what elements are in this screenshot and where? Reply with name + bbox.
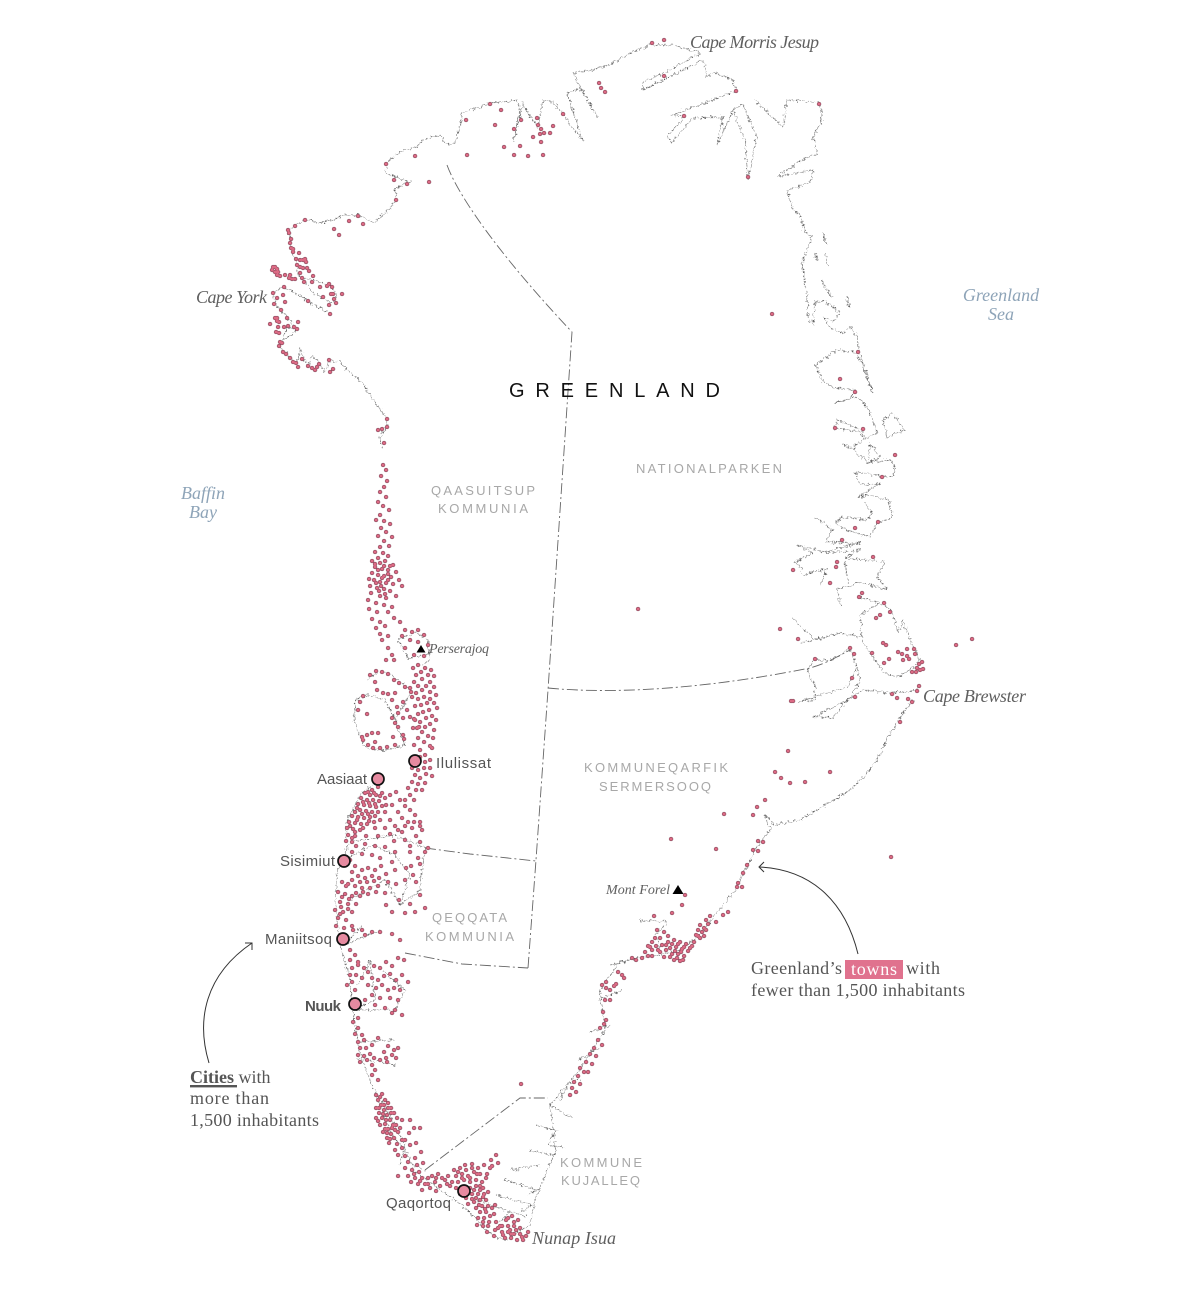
callout: towns: towns (851, 959, 897, 979)
region labels: KOMMUNEQARFIK (584, 760, 728, 775)
cape labels: Cape Morris Jesup (690, 32, 819, 52)
arrow: towns (759, 862, 858, 954)
region labels: SERMERSOOQ (599, 779, 711, 794)
region labels: NATIONALPARKEN (636, 461, 782, 476)
region labels: KUJALLEQ (561, 1173, 640, 1188)
region labels: KOMMUNE (560, 1155, 642, 1170)
callout: cities: Cities with (190, 1067, 271, 1087)
callout: cities: more than (190, 1088, 269, 1108)
sea labels: Greenland (963, 285, 1040, 305)
city labels: Aasiaat (317, 771, 368, 788)
arrow: cities (204, 943, 252, 1063)
cape labels (196, 32, 1027, 1248)
callout: cities (190, 1067, 319, 1130)
city labels: Ilulissat (436, 755, 492, 772)
region labels: QEQQATA (432, 910, 507, 925)
city labels: Maniitsoq (265, 931, 332, 948)
city labels: Qaqortoq (386, 1195, 451, 1212)
municipal borders (405, 165, 850, 1170)
callout: towns: with (906, 958, 940, 978)
sea labels: Sea (988, 304, 1014, 324)
region labels: QAASUITSUP (431, 483, 535, 498)
city labels: Sisimiut (280, 853, 336, 870)
sea labels: Baffin (181, 483, 225, 503)
sea labels: Bay (189, 502, 217, 522)
city labels: Nuuk (305, 998, 342, 1015)
title: GREENLAND (509, 380, 720, 402)
region labels (425, 461, 782, 1188)
city labels (265, 755, 492, 1212)
callout: towns (751, 958, 965, 1000)
region labels: KOMMUNIA (438, 501, 528, 516)
peak: Mont Forel: Mont Forel (605, 883, 670, 898)
sea labels (181, 285, 1040, 522)
peak: Perserajoq: Perserajoq (428, 642, 489, 657)
callout: cities: 1,500 inhabitants (190, 1110, 319, 1130)
cape labels: Cape Brewster (923, 686, 1027, 706)
cape labels: Cape York (196, 287, 268, 307)
map: Greenland coastline (273, 45, 920, 1241)
city markers (337, 755, 470, 1197)
region labels: KOMMUNIA (425, 929, 514, 944)
callout: towns: Greenland’s (751, 958, 842, 978)
town dots (270, 40, 972, 1240)
callout: towns: fewer than 1,500 inhabitants (751, 980, 965, 1000)
cape labels: Nunap Isua (531, 1228, 616, 1248)
